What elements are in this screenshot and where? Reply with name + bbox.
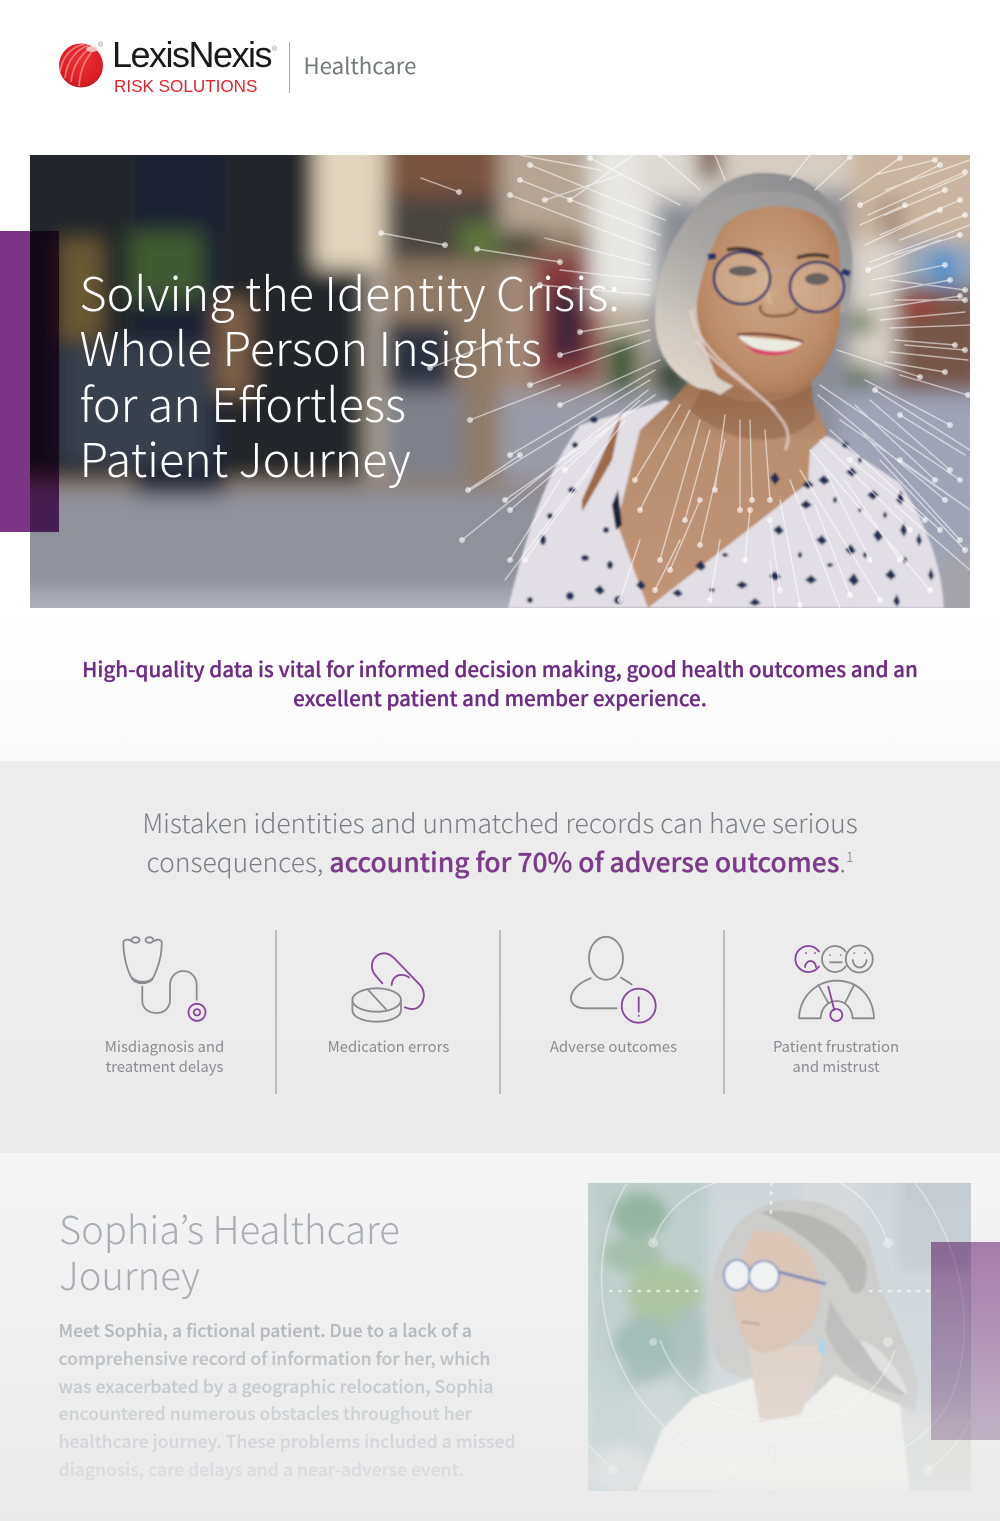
- intro statement: [82, 653, 918, 712]
- woman: face: [697, 206, 841, 393]
- woman: chest and neck: [617, 370, 828, 608]
- woman: earring: [818, 1339, 826, 1355]
- woman: blouse spots: [527, 417, 934, 607]
- logo: [59, 34, 416, 96]
- logo sphere: [59, 43, 103, 88]
- hero title: [80, 185, 969, 543]
- background: fade band: [0, 608, 1000, 761]
- logo registered mark right: ®: [272, 46, 277, 53]
- journey heading: [59, 1201, 400, 1302]
- journey body text: Meet Sophia, a fictional patient. Due to a lack of a: [58, 1318, 472, 1343]
- hero title: Solving the Identity Crisis:: [80, 258, 620, 324]
- photo fade wash: [588, 1183, 971, 1491]
- label: adverse outcomes: Adverse outcomes: [550, 1036, 677, 1057]
- journey body text: encountered numerous obstacles throughout her: [58, 1401, 472, 1426]
- hero title: Patient Journey: [80, 424, 411, 491]
- woman: hair: [655, 173, 852, 395]
- consequences statement: consequences, accounting for 70% of adverse outcomes.1: [146, 841, 854, 880]
- woman: eyebrows, eyes, nose shadow: [727, 249, 829, 258]
- icon: pills: [352, 952, 425, 1023]
- column dividers: [275, 930, 725, 1094]
- woman: blouse: [508, 173, 944, 608]
- label: misdiagnosis: treatment delays: [106, 1056, 223, 1077]
- journey body text: comprehensive record of information for her, which: [58, 1346, 490, 1371]
- woman: hair and shoulders: [637, 1200, 930, 1491]
- journey body text: diagnosis, care delays and a near-adverse event.: [58, 1457, 464, 1482]
- woman: smile: [737, 335, 803, 351]
- icon: stethoscope: [122, 936, 206, 1022]
- label: patient frustration: and mistrust: [792, 1056, 880, 1077]
- label: patient frustration: Patient frustration: [773, 1036, 899, 1057]
- woman: white shirt: [637, 1375, 910, 1491]
- consequences statement: [142, 802, 858, 880]
- journey body text: [58, 1318, 516, 1482]
- hero title: for an Effortless: [80, 369, 406, 436]
- blurred backdrop: [570, 1170, 990, 1510]
- journey photo: [588, 1183, 971, 1491]
- icon: satisfaction gauge: [794, 944, 875, 1022]
- label: misdiagnosis: [105, 1036, 224, 1077]
- background: consequences band: [0, 761, 1000, 1153]
- orbit circles and nodes: [588, 1183, 971, 1491]
- street background: [0, 130, 1000, 632]
- purple accent panel: [931, 1242, 1000, 1440]
- journey heading: Sophia’s Healthcare: [59, 1201, 400, 1256]
- icon: person alert: [570, 936, 657, 1024]
- logo subline: RISK SOLUTIONS: [114, 77, 257, 96]
- journey body text: healthcare journey. These problems included a missed: [58, 1429, 516, 1454]
- journey heading: Journey: [59, 1247, 200, 1302]
- woman: neck: [748, 1345, 826, 1422]
- purple accent bar: [0, 231, 59, 532]
- woman: neck shadow: [690, 385, 815, 440]
- logo registered mark left: ®: [98, 42, 103, 49]
- label: misdiagnosis: Misdiagnosis and: [105, 1036, 224, 1057]
- radial data rays: [381, 150, 970, 608]
- hero title: Whole Person Insights: [80, 313, 542, 380]
- woman: face: [734, 1230, 820, 1353]
- label: patient frustration: [773, 1036, 899, 1077]
- background: journey band: [0, 1153, 1000, 1521]
- label: medication errors: Medication errors: [328, 1036, 449, 1057]
- journey body text: was exacerbated by a geographic relocation, Sophia: [58, 1374, 493, 1399]
- intro statement: High-quality data is vital for informed decision making, good health outcomes and an: [82, 653, 918, 683]
- intro statement: excellent patient and member experience.: [293, 682, 707, 712]
- hero photo: [30, 155, 970, 608]
- consequences statement: Mistaken identities and unmatched records can have serious: [142, 802, 858, 841]
- woman: glasses: [708, 252, 850, 312]
- logo divider: [289, 42, 290, 93]
- woman: loose hair strand: [690, 310, 788, 450]
- logo healthcare label: Healthcare: [304, 49, 416, 81]
- woman: hair lock beside cheek: [690, 305, 712, 372]
- logo wordmark: LexisNexis: [112, 34, 271, 75]
- woman: glasses: [724, 1260, 779, 1291]
